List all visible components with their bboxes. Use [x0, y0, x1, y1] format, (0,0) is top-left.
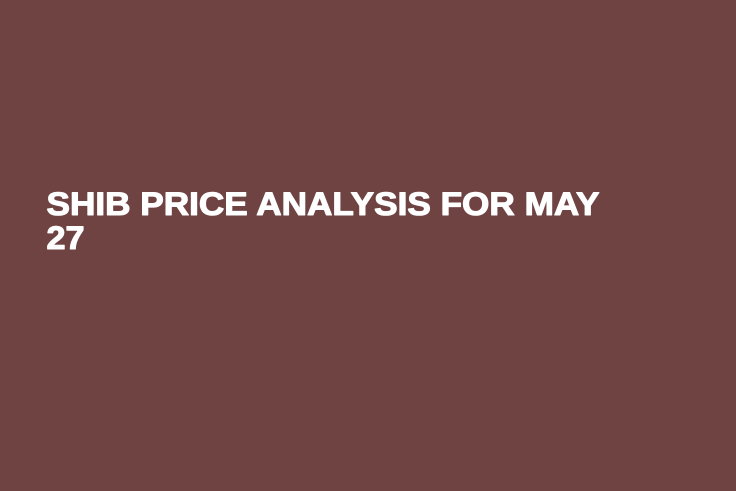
- title: SHIB PRICE ANALYSIS FOR MAY: [46, 186, 600, 222]
- title: [46, 186, 600, 256]
- title: 27: [46, 220, 84, 256]
